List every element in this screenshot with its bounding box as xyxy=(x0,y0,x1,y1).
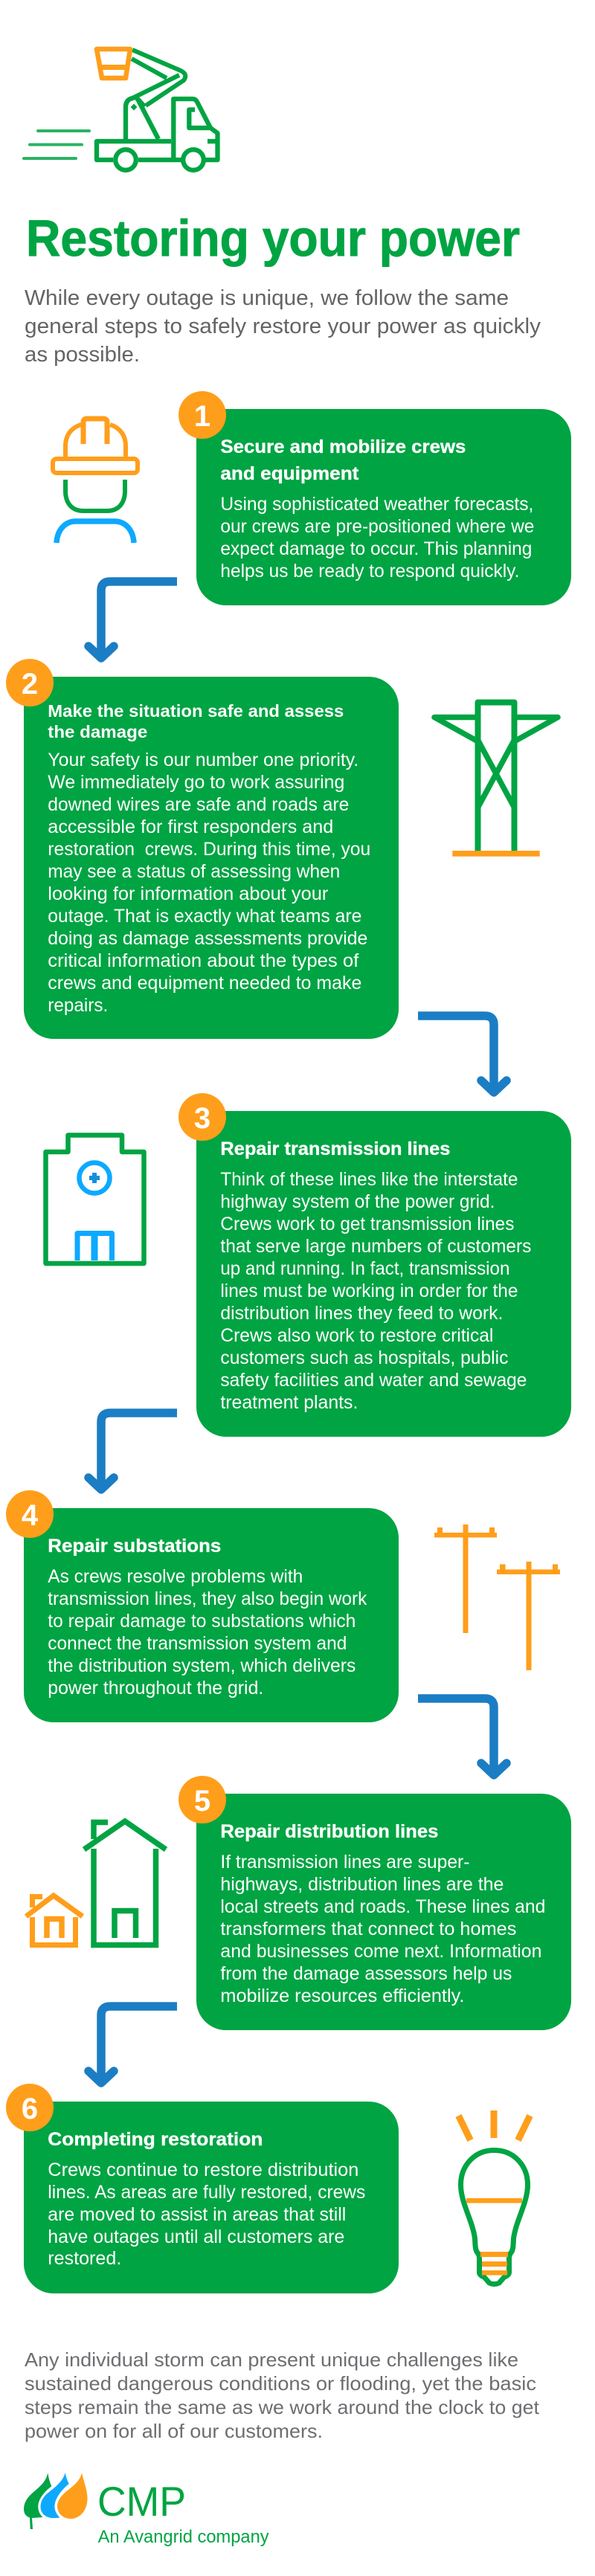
icon: utility poles xyxy=(434,1524,560,1670)
intro text: as possible. xyxy=(25,343,140,367)
icon: hospital xyxy=(46,1135,144,1263)
intro text: general steps to safely restore your power as quickly xyxy=(25,315,541,338)
panel: step 6 xyxy=(6,2084,399,2293)
body: step 2: restoration crews. During this time, you xyxy=(48,839,370,860)
heading: step 2 xyxy=(48,701,344,741)
closing text xyxy=(25,2348,540,2442)
body: step 6: restored. xyxy=(48,2248,121,2269)
body: step 4 xyxy=(48,1566,367,1698)
body: step 5: and businesses come next. Information xyxy=(220,1941,541,1962)
closing text: power on for all of our customers. xyxy=(25,2420,323,2442)
heading: step 1 xyxy=(220,437,466,484)
heading: step 6: Completing restoration xyxy=(48,2129,263,2150)
body: step 3: lines must be working in order for the xyxy=(220,1281,518,1301)
body: step 5: local streets and roads. These lines and xyxy=(220,1896,545,1917)
arrow: step 4 to 5 xyxy=(418,1698,506,1775)
title: Restoring your power xyxy=(26,210,520,267)
body: step 2: outage. That is exactly what teams are xyxy=(48,906,361,927)
body: step 1 xyxy=(220,494,534,582)
body: step 5: from the damage assessors help us xyxy=(220,1963,512,1984)
badge: 4: 4 xyxy=(22,1499,39,1532)
body: step 3: Think of these lines like the interstate xyxy=(220,1169,518,1190)
body: step 2: Your safety is our number one priority. xyxy=(48,750,358,770)
arrow: step 1 to 2 xyxy=(89,582,177,658)
badge: 6 xyxy=(6,2084,54,2131)
body: step 6: lines. As areas are fully restored, crews xyxy=(48,2182,365,2203)
heading: step 3: Repair transmission lines xyxy=(220,1139,450,1159)
closing text: sustained dangerous conditions or flooding, yet the basic xyxy=(25,2372,536,2395)
body: step 3: that serve large numbers of customers xyxy=(220,1236,531,1257)
arrow: step 5 to 6 xyxy=(89,2006,177,2083)
body: step 4: power throughout the grid. xyxy=(48,1678,263,1698)
body: step 3: up and running. In fact, transmission xyxy=(220,1258,509,1279)
panel: step 2 xyxy=(6,659,399,1039)
body: step 4: transmission lines, they also begin work xyxy=(48,1588,367,1609)
badge: 1 xyxy=(178,391,226,439)
body: step 6 xyxy=(48,2160,365,2269)
panel: step 5 xyxy=(178,1776,571,2030)
body: step 1: helps us be ready to respond quickly. xyxy=(220,561,519,582)
body: step 4: to repair damage to substations which xyxy=(48,1611,356,1632)
body: step 5: If transmission lines are super- xyxy=(220,1852,469,1873)
logo wordmark: CMP xyxy=(97,2478,186,2525)
logo tagline: An Avangrid company xyxy=(98,2527,269,2547)
body: step 2: looking for information about your xyxy=(48,883,328,904)
panel: step 3 xyxy=(178,1093,571,1437)
body: step 2: doing as damage assessments provide xyxy=(48,928,367,949)
body: step 2: crews and equipment needed to make xyxy=(48,973,361,994)
body: step 6: have outages until all customers are xyxy=(48,2226,344,2247)
body: step 3 xyxy=(220,1169,531,1413)
body: step 5: transformers that connect to homes xyxy=(220,1919,516,1939)
body: step 2: repairs. xyxy=(48,995,108,1016)
badge: 3: 3 xyxy=(194,1102,210,1135)
badge: 2 xyxy=(6,659,54,706)
intro text xyxy=(25,286,541,367)
heading: step 1: and equipment xyxy=(220,463,359,484)
panel: step 1 xyxy=(178,391,571,605)
body: step 3: Crews work to get transmission lines xyxy=(220,1214,514,1234)
heading: step 4: Repair substations xyxy=(48,1536,221,1556)
badge: 6: 6 xyxy=(22,2093,38,2125)
icon: transmission tower xyxy=(434,702,558,857)
body: step 1: our crews are pre-positioned where we xyxy=(220,516,534,537)
body: step 6: are moved to assist in areas that still xyxy=(48,2204,346,2225)
badge: 5 xyxy=(178,1776,226,1823)
body: step 4: the distribution system, which delivers xyxy=(48,1655,356,1676)
heading: step 2: Make the situation safe and assess xyxy=(48,701,344,721)
body: step 3: Crews also work to restore critical xyxy=(220,1325,493,1346)
body: step 2 xyxy=(48,750,370,1016)
heading: step 1: Secure and mobilize crews xyxy=(220,437,466,457)
body: step 2: downed wires are safe and roads are xyxy=(48,794,349,815)
icon: bucket truck xyxy=(24,49,217,170)
badge: 5: 5 xyxy=(194,1785,210,1817)
body: step 2: may see a status of assessing when xyxy=(48,861,340,882)
badge: 4 xyxy=(6,1490,54,1538)
heading: step 5: Repair distribution lines xyxy=(220,1821,438,1842)
body: step 3: customers such as hospitals, public xyxy=(220,1347,508,1368)
badge: 2: 2 xyxy=(22,668,38,701)
body: step 1: expect damage to occur. This planning xyxy=(220,538,532,559)
closing text: Any individual storm can present unique challenges like xyxy=(25,2348,518,2371)
body: step 3: distribution lines they feed to work. xyxy=(220,1303,503,1324)
closing text: steps remain the same as we work around the clock to get xyxy=(25,2396,540,2418)
arrow: step 2 to 3 xyxy=(418,1016,506,1092)
body: step 3: highway system of the power grid. xyxy=(220,1191,495,1212)
body: step 1: Using sophisticated weather forecasts, xyxy=(220,494,533,515)
body: step 4: As crews resolve problems with xyxy=(48,1566,303,1587)
intro text: While every outage is unique, we follow the same xyxy=(25,286,509,310)
icon: houses xyxy=(26,1821,166,1945)
panel: step 4 xyxy=(6,1490,399,1722)
body: step 6: Crews continue to restore distribution xyxy=(48,2160,358,2180)
icon: crew worker with hard hat xyxy=(53,419,138,543)
body: step 5 xyxy=(220,1852,545,2006)
body: step 4: connect the transmission system and xyxy=(48,1633,347,1654)
body: step 3: safety facilities and water and sewage xyxy=(220,1370,527,1391)
icon: light bulb xyxy=(458,2110,530,2284)
body: step 5: highways, distribution lines are the xyxy=(220,1874,504,1895)
body: step 2: We immediately go to work assuring xyxy=(48,772,344,793)
arrow: step 3 to 4 xyxy=(89,1413,177,1490)
body: step 2: accessible for first responders and xyxy=(48,817,333,837)
badge: 1: 1 xyxy=(194,400,210,433)
badge: 3 xyxy=(178,1093,226,1141)
heading: step 2: the damage xyxy=(48,722,147,741)
body: step 5: mobilize resources efficiently. xyxy=(220,1986,464,2006)
body: step 3: treatment plants. xyxy=(220,1392,358,1413)
logo leaves xyxy=(24,2473,88,2529)
logo: CMP xyxy=(24,2473,269,2547)
body: step 2: critical information about the types of xyxy=(48,950,358,971)
